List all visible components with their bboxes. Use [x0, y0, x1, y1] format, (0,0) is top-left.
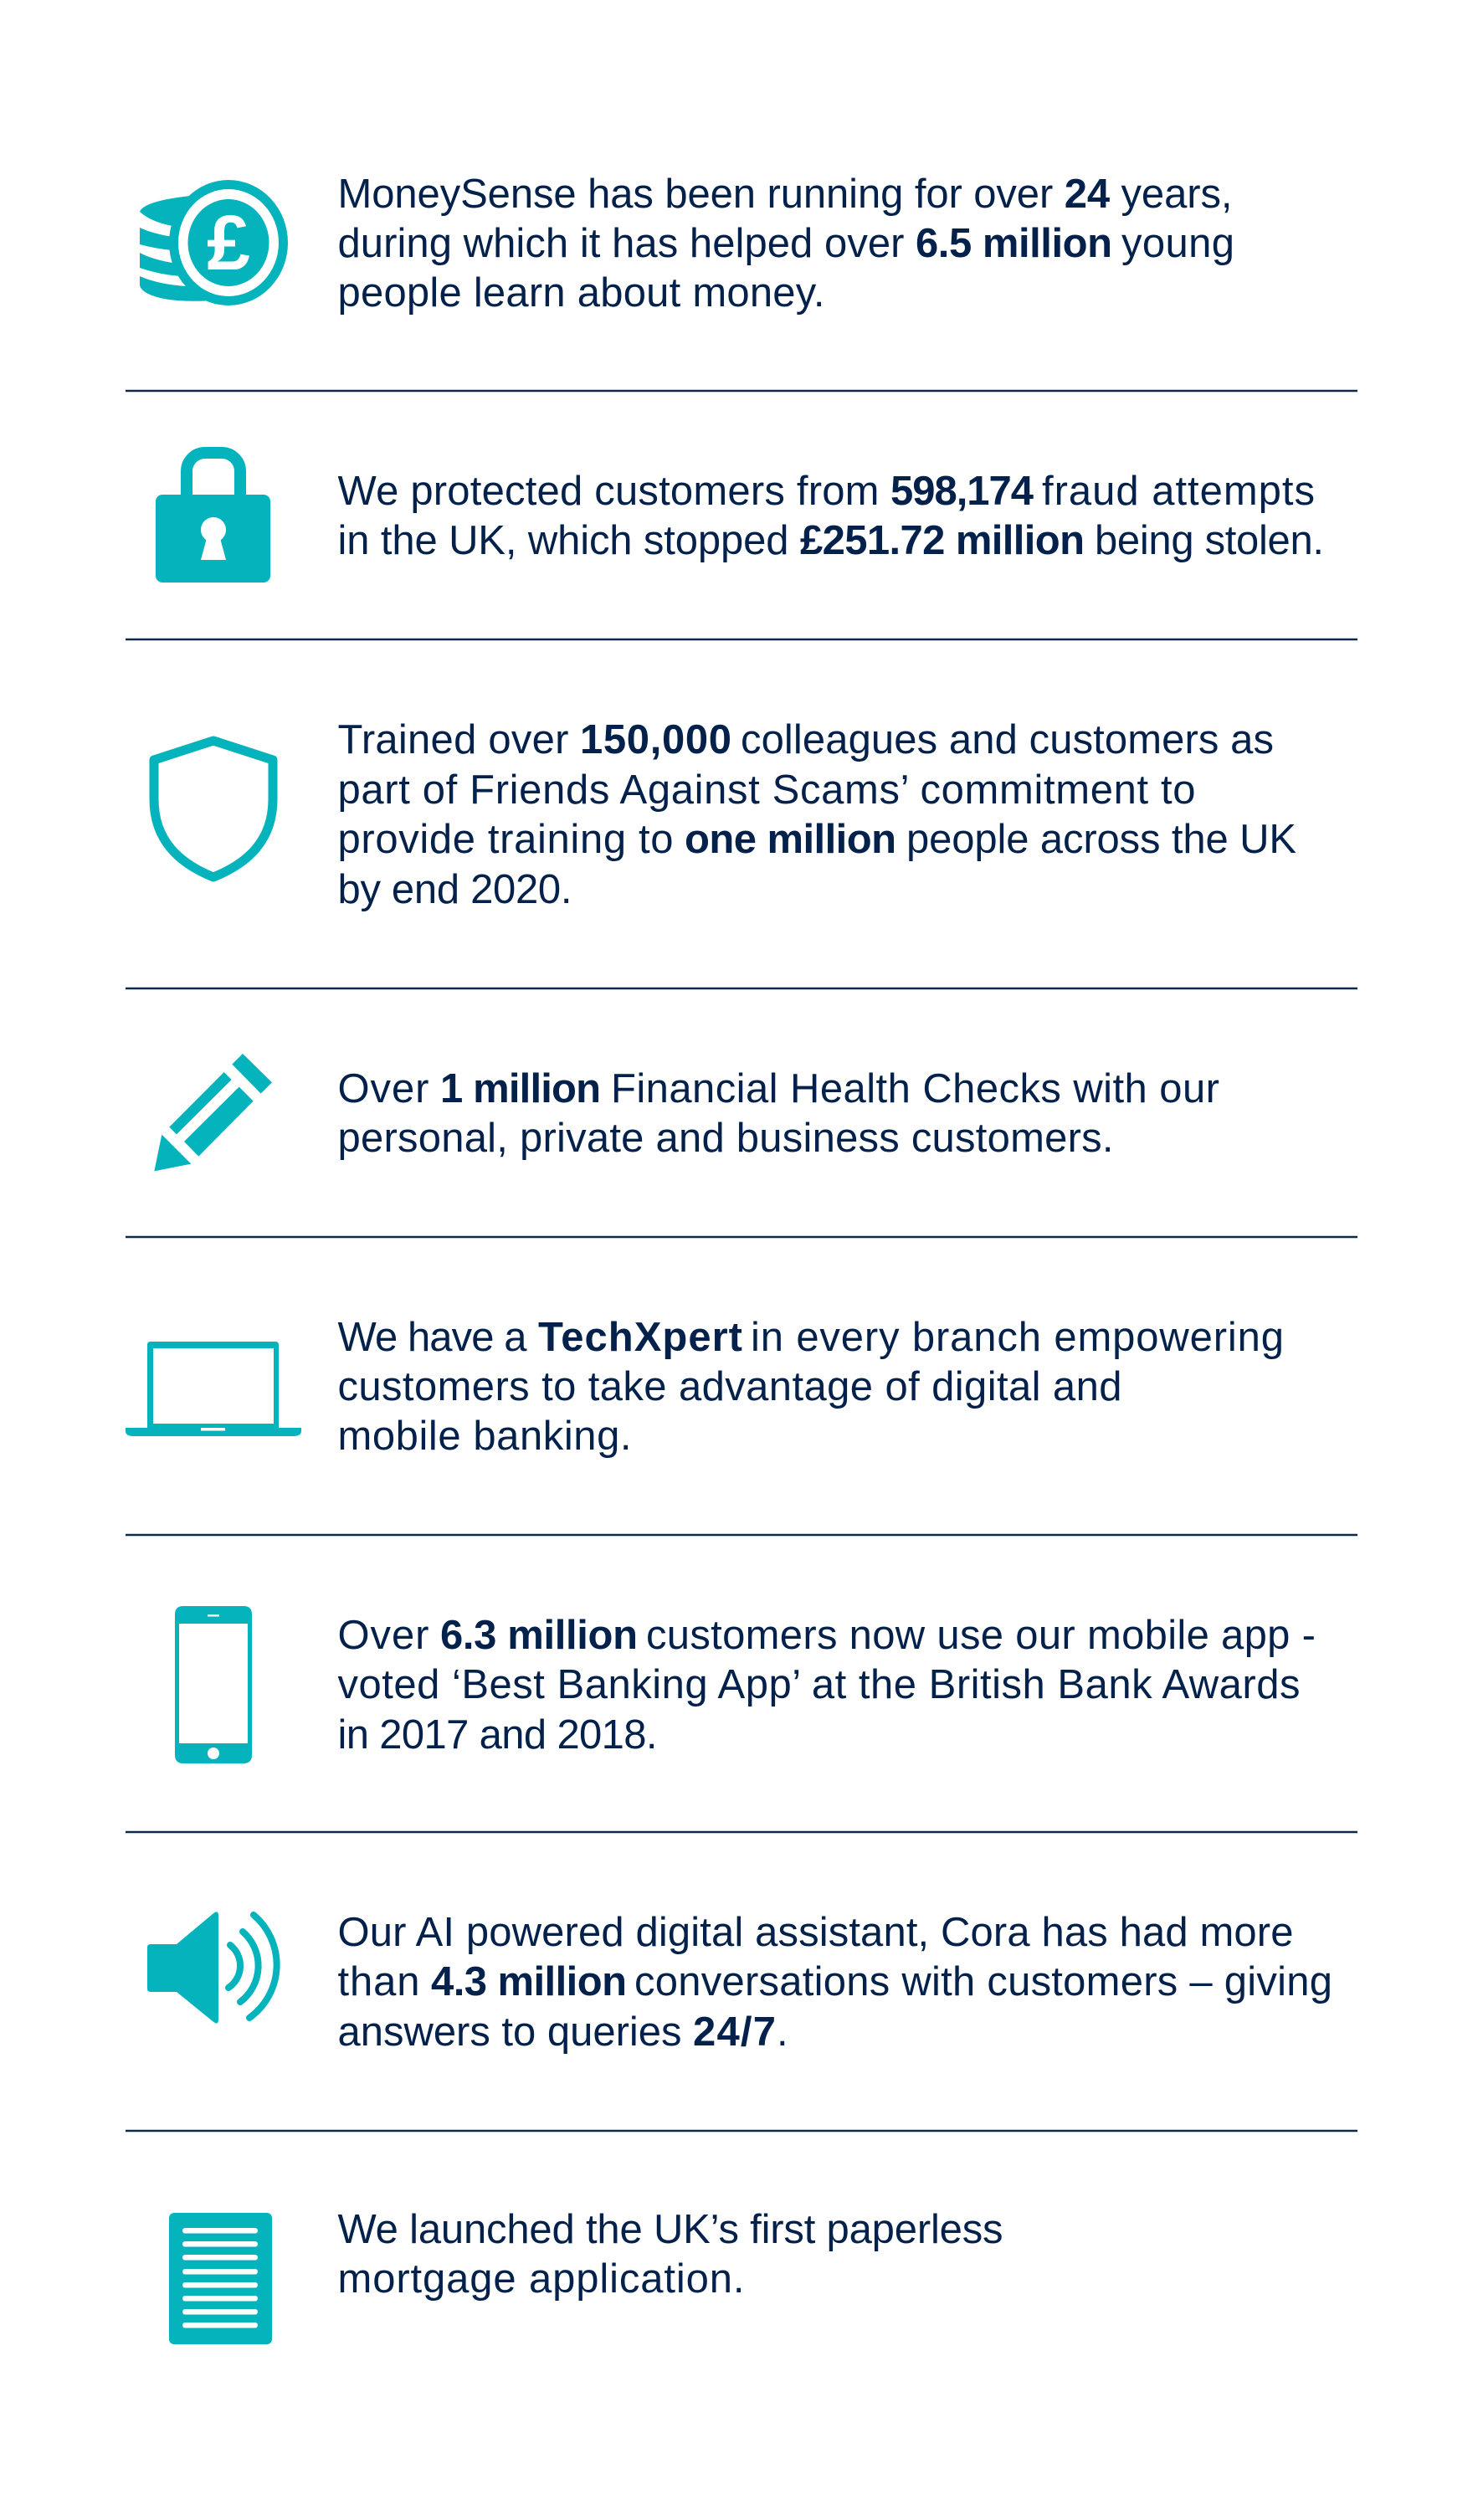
text: Friends Against Scams: 150,000 [580, 717, 731, 762]
icon: pound coins [140, 180, 288, 305]
text: MoneySense: people learn about money. [338, 270, 825, 316]
text: Financial Health Checks: Financial Health Checks with our [611, 1066, 1219, 1111]
text: mobile app: 6.3 million [440, 1613, 638, 1658]
text: Friends Against Scams: Trained over [338, 717, 569, 762]
text: fraud: fraud attempts [1042, 469, 1315, 514]
text: fraud: £251.72 million [800, 518, 1085, 563]
text: Cora assistant: . [777, 2009, 788, 2055]
icon: pound coins: £ [207, 199, 250, 286]
text: Financial Health Checks: personal, private and business customers. [338, 1116, 1113, 1161]
icon: laptop [126, 1342, 301, 1436]
text: Cora assistant: 24/7 [693, 2009, 776, 2055]
text: MoneySense: young [1121, 221, 1234, 266]
icon: shield [154, 741, 273, 877]
text: TechXpert: in every branch empowering [751, 1315, 1284, 1360]
text: Financial Health Checks: Over [338, 1066, 428, 1111]
text: TechXpert: mobile banking. [338, 1414, 631, 1459]
text: Financial Health Checks: 1 million [440, 1066, 601, 1111]
text: Friends Against Scams: by end 2020. [338, 867, 572, 912]
text: Cora assistant: answers to queries [338, 2009, 681, 2055]
text: paperless mortgage: We launched the UK’s first paperless [338, 2207, 1003, 2252]
text: Friends Against Scams: one million [685, 817, 896, 862]
text: fraud: 598,174 [890, 469, 1034, 514]
text: Cora assistant: 4.3 million [431, 1959, 627, 2004]
icon: padlock [156, 453, 270, 583]
text: MoneySense: MoneySense has been running for over 24 years, [338, 172, 1232, 217]
text: Friends Against Scams: provide training to [338, 817, 673, 862]
text: TechXpert: TechXpert [538, 1315, 742, 1360]
text: MoneySense: during which it has helped over [338, 221, 904, 266]
text: paperless mortgage: mortgage application. [338, 2256, 745, 2302]
text: Friends Against Scams: colleagues and customers as [741, 717, 1274, 762]
text: Friends Against Scams: people across the UK [906, 817, 1296, 862]
icon: pencil [154, 1054, 272, 1171]
icon: speaker [147, 1912, 277, 2024]
text: TechXpert: We have a [338, 1315, 527, 1360]
text: fraud: in the UK, which stopped [338, 518, 788, 563]
text: mobile app: Over [338, 1613, 428, 1658]
text: Friends Against Scams: part of Friends Against Scams’ commitment to [338, 767, 1195, 813]
text: TechXpert: customers to take advantage of digital and [338, 1364, 1121, 1409]
text: mobile app: customers now use our mobile app - [646, 1613, 1316, 1658]
text: MoneySense: 6.5 million [916, 221, 1112, 266]
text: mobile app: in 2017 and 2018. [338, 1712, 658, 1758]
icon: mobile phone [175, 1606, 252, 1763]
icon: document [169, 2213, 272, 2344]
text: fraud: being stolen. [1095, 518, 1324, 563]
text: Cora assistant: Our AI powered digital assistant, Cora has had more [338, 1910, 1294, 1955]
text: Cora assistant: conversations with customers – giving [634, 1959, 1332, 2004]
text: fraud: We protected customers from [338, 469, 879, 514]
text: Cora assistant: than [338, 1959, 420, 2004]
text: mobile app: voted ‘Best Banking App’ at the British Bank Awards [338, 1662, 1301, 1707]
